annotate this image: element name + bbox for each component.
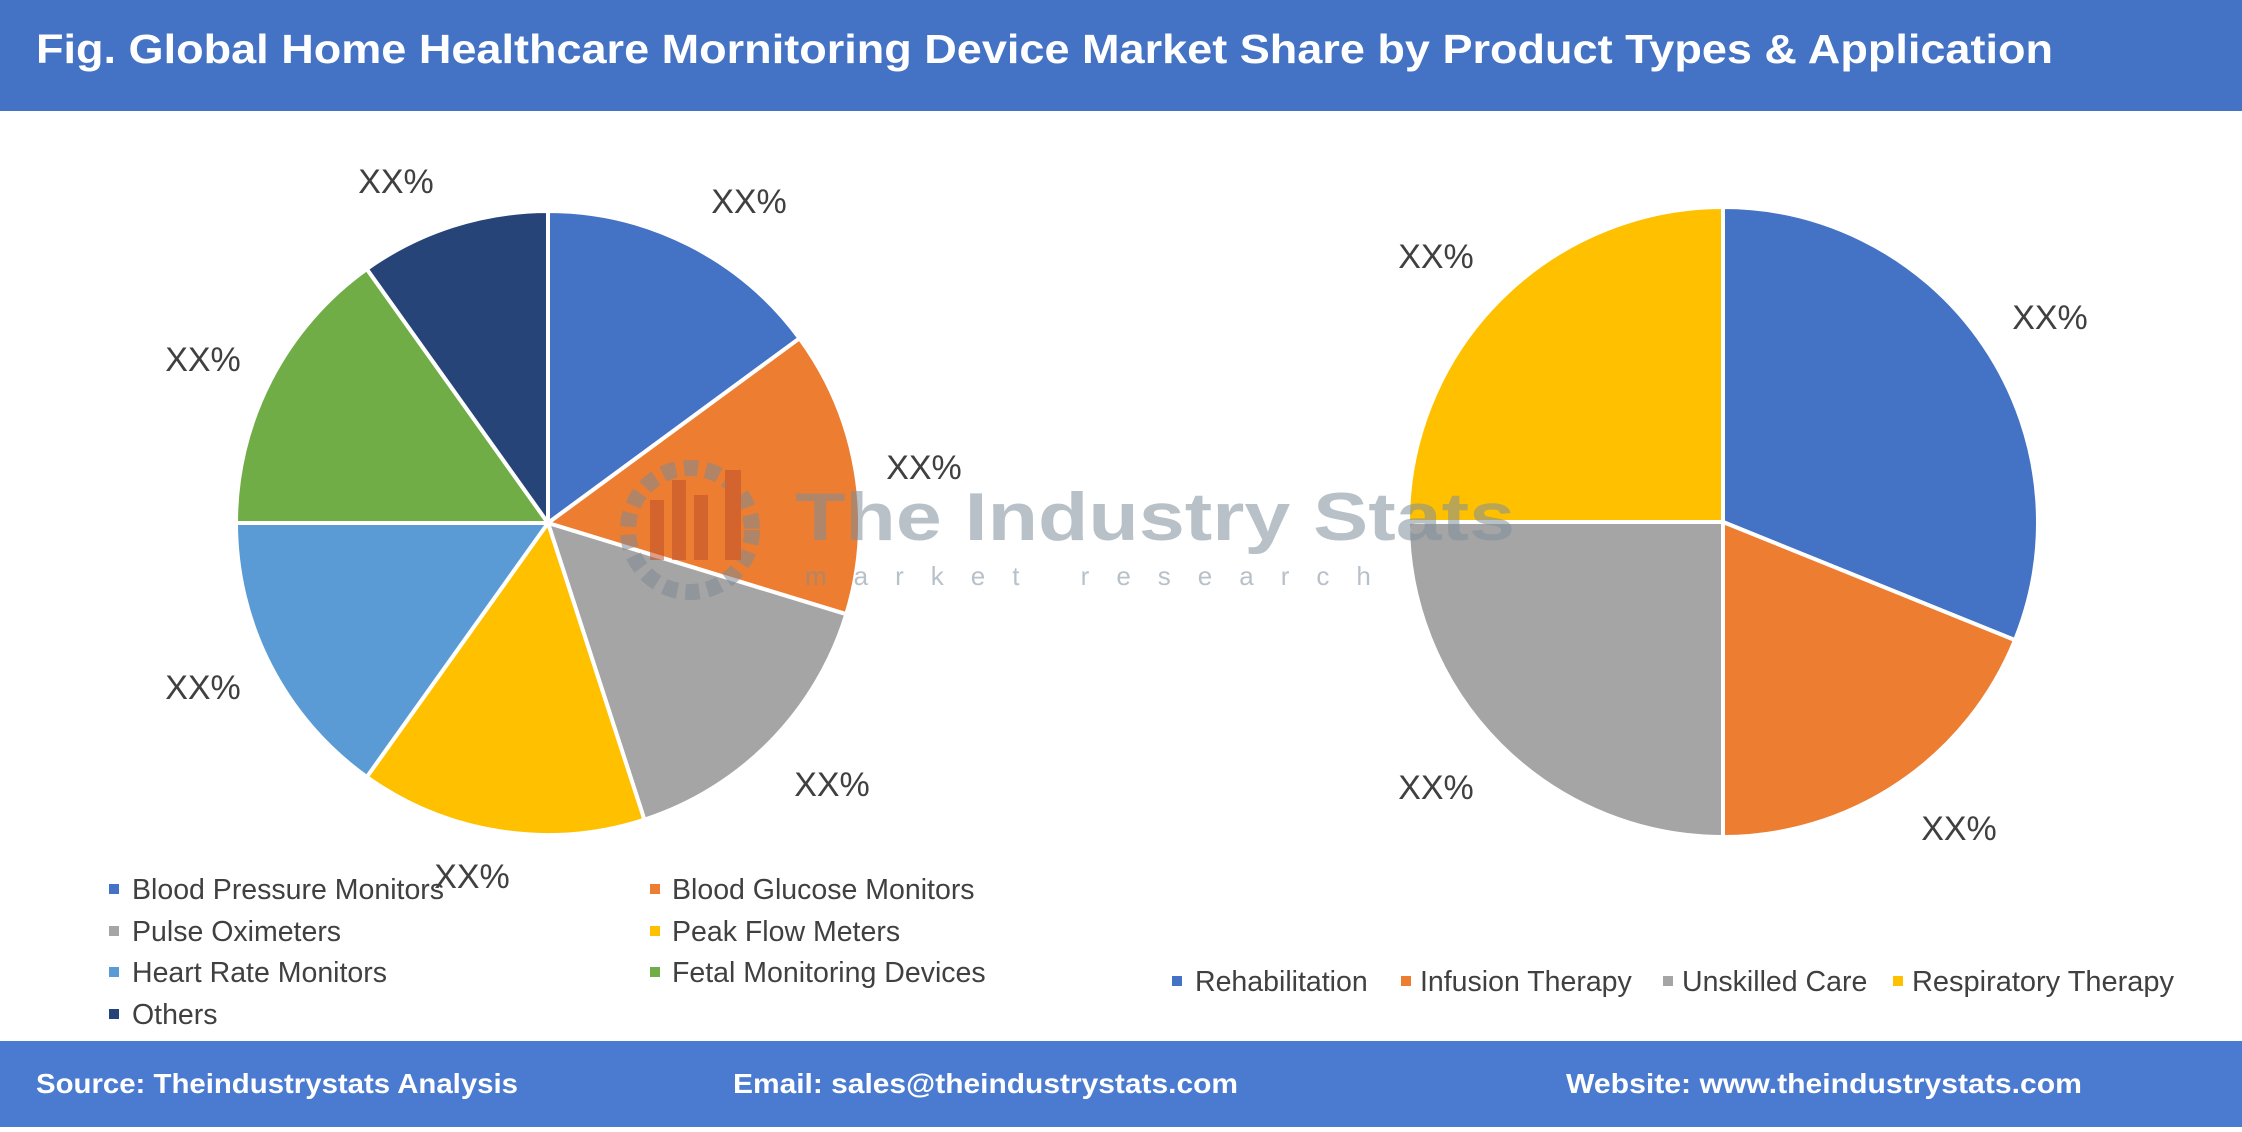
data labels: XX% (1398, 238, 1474, 276)
legend: product types: Pulse Oximeters (132, 916, 341, 948)
footer (0, 1041, 2242, 1127)
data labels: XX% (165, 669, 241, 707)
data labels: XX% (358, 163, 434, 201)
pie chart: application (1408, 207, 2038, 837)
data labels: XX% (886, 449, 962, 487)
legend: application (1172, 966, 2175, 998)
legend: product types: Others (132, 999, 218, 1031)
watermark (628, 468, 1515, 592)
data labels: XX% (1398, 769, 1474, 807)
legend: product types: Blood Glucose Monitors (672, 874, 975, 906)
title bar (0, 0, 2242, 111)
legend: product types: Heart Rate Monitors (132, 957, 387, 989)
legend: product types (109, 874, 986, 1031)
data labels: XX% (434, 858, 510, 896)
data labels: XX% (2012, 299, 2088, 337)
data labels (165, 163, 2088, 896)
legend: product types: Fetal Monitoring Devices (672, 957, 986, 989)
data labels: XX% (1921, 810, 1997, 848)
legend: application: Respiratory Therapy (1912, 966, 2175, 998)
legend: application: Rehabilitation (1195, 966, 1368, 998)
legend: application: Unskilled Care (1682, 966, 1867, 998)
pie chart: product types (236, 211, 860, 835)
watermark: market research (805, 561, 1398, 591)
title: Fig. Global Home Healthcare Mornitoring Device Market Share by Product Types & Application (36, 26, 2053, 72)
data labels: XX% (711, 183, 787, 221)
footer: email: Email: sales@theindustrystats.com (733, 1068, 1238, 1099)
footer: source: Source: Theindustrystats Analysis (36, 1068, 518, 1099)
watermark: The Industry Stats (795, 479, 1515, 555)
legend: product types: Peak Flow Meters (672, 916, 900, 948)
footer: website: Website: www.theindustrystats.com (1566, 1068, 2082, 1099)
data labels: XX% (165, 341, 241, 379)
legend: product types: Blood Pressure Monitors (132, 874, 444, 906)
data labels: XX% (794, 766, 870, 804)
legend: application: Infusion Therapy (1420, 966, 1633, 998)
